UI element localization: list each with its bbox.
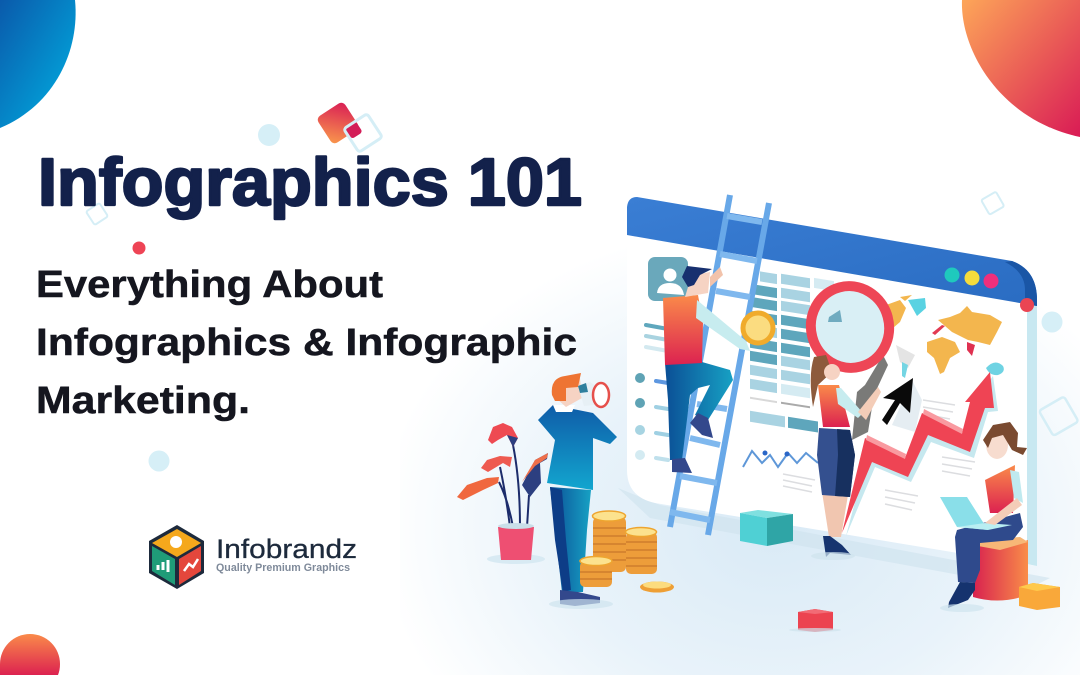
illustration: browser window	[618, 197, 1050, 588]
hair	[552, 373, 581, 401]
subtitle: Infographics & Infographic	[36, 322, 577, 364]
magnifier handle	[852, 355, 888, 440]
head	[986, 431, 1008, 459]
illustration: teal box	[740, 510, 793, 546]
head	[824, 364, 840, 380]
window title bar	[627, 197, 1037, 306]
single coin	[640, 582, 674, 592]
window control dots	[944, 268, 1034, 312]
decor: bottom-left orange circle	[0, 634, 60, 675]
hair	[682, 266, 712, 287]
stems	[499, 445, 529, 527]
background glow	[400, 150, 1080, 675]
legs	[822, 492, 848, 537]
window body	[627, 225, 1037, 566]
subtitle: Marketing.	[36, 380, 250, 422]
window shadow	[618, 488, 1050, 588]
laptop	[940, 497, 988, 530]
subtitle	[36, 264, 577, 422]
text lines	[783, 400, 975, 510]
stool top	[978, 537, 1028, 550]
illustration: ladder man	[663, 195, 773, 535]
arm	[985, 498, 1022, 525]
illustration: potted plant	[457, 423, 548, 564]
illustration: coin stacks	[580, 511, 674, 592]
yellow box	[1019, 583, 1060, 610]
skirt	[817, 428, 855, 497]
arm	[696, 300, 750, 351]
feet	[948, 582, 975, 608]
decor: top-left blue circle	[0, 0, 76, 128]
logo tagline: Quality Premium Graphics	[216, 562, 350, 574]
shoes	[560, 590, 600, 606]
sleeve	[1010, 470, 1023, 503]
floor shadows	[549, 552, 984, 632]
legs	[665, 362, 733, 460]
stack front	[580, 556, 612, 587]
hair	[983, 422, 1027, 455]
vest	[663, 295, 703, 365]
lens contents	[828, 310, 842, 322]
leaves	[488, 423, 518, 447]
pot shadow	[487, 554, 545, 564]
world map	[886, 295, 1002, 374]
illustration: red rising arrow	[842, 372, 998, 536]
head	[685, 272, 710, 297]
stack right	[626, 528, 657, 574]
illustration: seated woman	[940, 422, 1060, 610]
coin	[743, 313, 773, 343]
window right edge	[1027, 300, 1037, 566]
ponytail	[811, 355, 832, 407]
illustration: standing woman	[811, 355, 881, 557]
line chart	[743, 450, 818, 467]
ladder	[670, 195, 769, 535]
illustration: megaphone man	[538, 373, 617, 606]
profile card icon	[648, 257, 688, 301]
stool	[973, 540, 1028, 601]
blouse	[818, 385, 850, 427]
shoes	[672, 413, 713, 473]
arm	[836, 388, 863, 418]
decor: top-right orange circle	[962, 0, 1080, 137]
raised hand	[710, 267, 723, 287]
jacket	[538, 405, 617, 490]
side list lines	[635, 325, 668, 460]
subtitle: Everything About	[36, 264, 383, 306]
illustration: red box	[798, 609, 833, 632]
title: Infographics 101	[38, 145, 582, 220]
trousers	[550, 487, 591, 592]
pot	[498, 527, 534, 560]
data table	[750, 268, 834, 435]
collar	[553, 405, 575, 412]
stack back	[592, 511, 626, 572]
shoes	[823, 536, 851, 557]
logo: Infobrandz	[149, 525, 357, 589]
head	[556, 378, 582, 407]
top	[985, 465, 1015, 513]
icon: hexagon cube	[149, 525, 204, 589]
logo name: Infobrandz	[216, 534, 357, 564]
hand	[858, 387, 881, 420]
title bar dark edge	[1005, 261, 1037, 306]
illustration: magnifier	[802, 277, 898, 440]
pot rim	[498, 523, 534, 529]
icon: cursor	[882, 378, 922, 432]
map highlights	[896, 298, 1004, 378]
magnifier lens	[802, 277, 898, 377]
legs	[955, 513, 1023, 583]
megaphone	[578, 382, 609, 407]
decor: floating shapes	[86, 101, 1078, 472]
